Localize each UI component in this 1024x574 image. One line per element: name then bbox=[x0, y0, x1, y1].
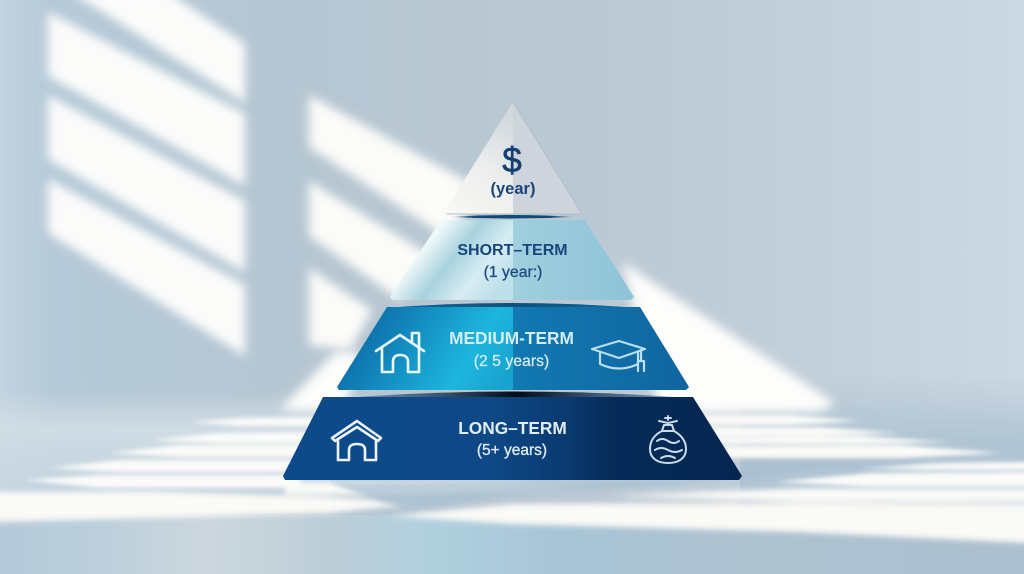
window light on wall, left bbox=[48, 0, 245, 356]
tier 1: top triangle bbox=[443, 102, 581, 214]
icon: house bbox=[332, 421, 381, 460]
label: 1 year: (1 year:) bbox=[484, 264, 542, 281]
label: year: (year) bbox=[491, 180, 535, 198]
label: 5+ years: (5+ years) bbox=[477, 442, 547, 459]
tier 2: short-term bbox=[390, 220, 634, 300]
icon: dollar sign: $ bbox=[502, 141, 522, 180]
label: short-term: SHORT–TERM bbox=[457, 242, 568, 259]
tier 3: medium-term bbox=[337, 307, 689, 390]
label: long-term: LONG–TERM bbox=[458, 418, 567, 438]
icon: house with chimney bbox=[376, 333, 424, 372]
light beams behind the pyramid bbox=[280, 262, 835, 414]
label: medium-term: MEDIUM-TERM bbox=[449, 328, 574, 348]
window light on wall, centre bbox=[309, 95, 480, 350]
floor tone, right bbox=[740, 375, 1024, 520]
floor foreground bbox=[0, 515, 1024, 574]
tier 4: long-term bbox=[283, 397, 742, 480]
separator shadow bbox=[358, 392, 675, 397]
icon: graduation cap bbox=[592, 341, 645, 371]
separator shadow bbox=[385, 303, 640, 308]
label: 2-5 years: (2 5 years) bbox=[474, 353, 549, 370]
light stripes on floor bbox=[25, 415, 1024, 488]
pyramid shadow bbox=[330, 462, 960, 510]
separator shadow bbox=[448, 215, 576, 218]
floor haze, left bbox=[0, 390, 330, 520]
icon: money bag bbox=[650, 416, 686, 463]
